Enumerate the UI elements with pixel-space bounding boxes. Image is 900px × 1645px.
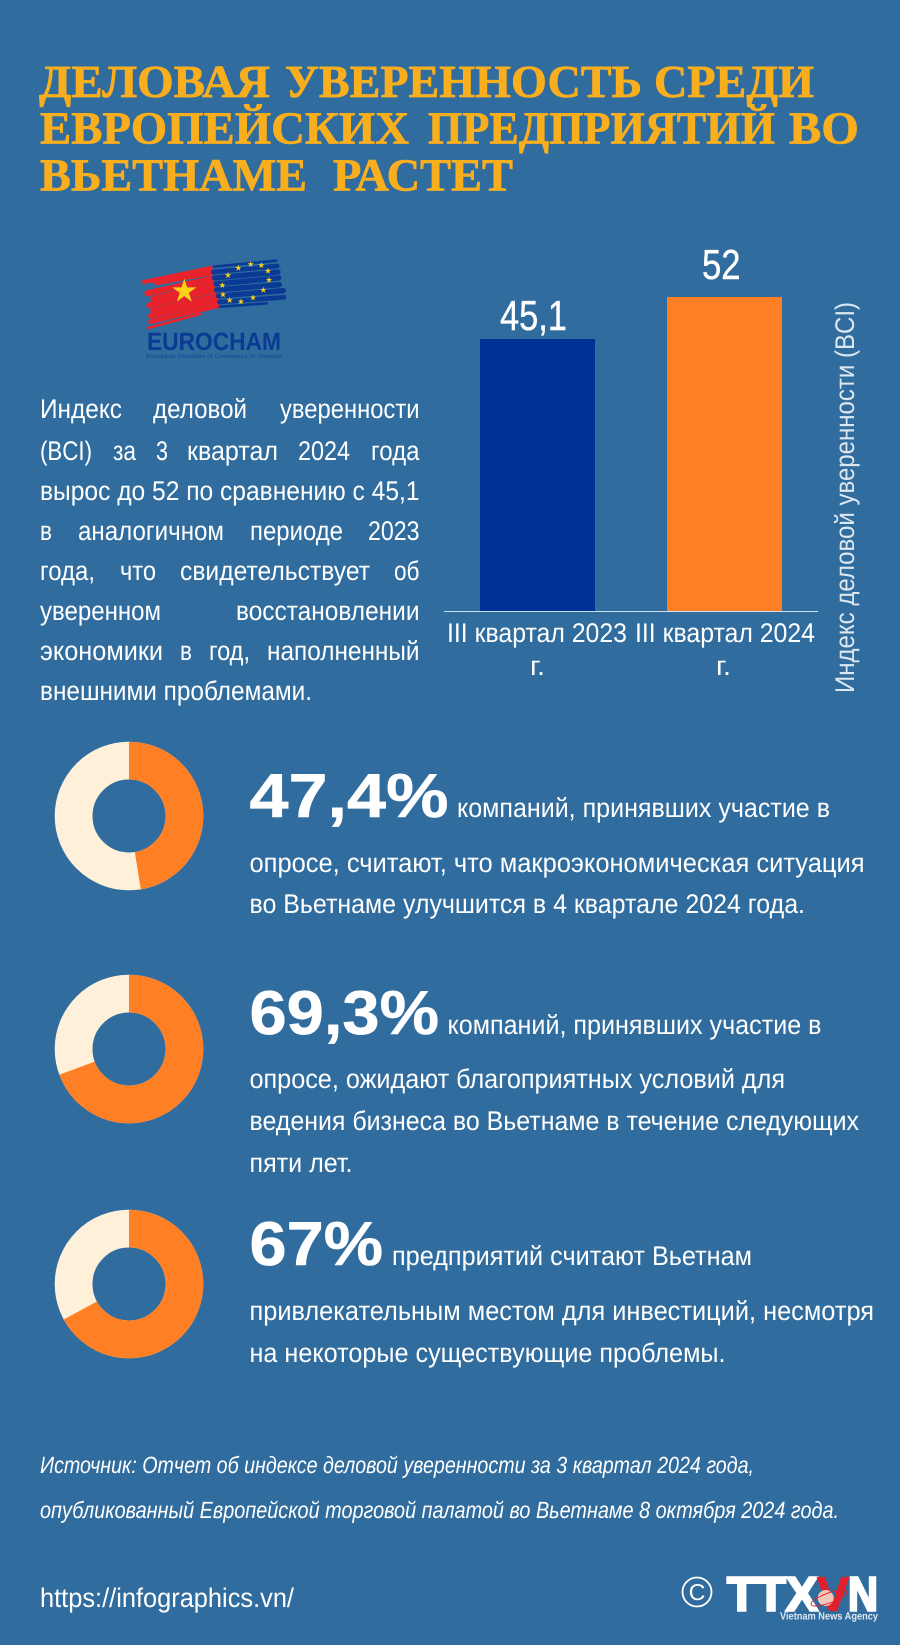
source note <box>40 1452 839 1523</box>
text block: BCI description: в <box>180 636 192 666</box>
stat text: на некоторые существующие проблемы. <box>250 1338 726 1368</box>
title: ВЬЕТНАМЕ <box>40 150 307 200</box>
text block: BCI description: об <box>394 556 420 586</box>
bar: Q3 2024 <box>667 297 782 611</box>
donut chart: 67% <box>74 1229 184 1339</box>
stat text: компаний, принявших участие в <box>457 793 830 823</box>
text block: BCI description: года <box>371 436 420 466</box>
text block: BCI description: в <box>40 516 52 546</box>
stat number: 47,4% <box>250 762 448 831</box>
stat text: ведения бизнеса во Вьетнаме в течение следующих <box>250 1106 859 1136</box>
title <box>39 56 859 200</box>
title: ПРЕДПРИЯТИЙ <box>428 102 775 154</box>
stat number: 69,3% <box>250 979 439 1048</box>
logo wordmark: EUROCHAM <box>147 328 281 356</box>
text block: BCI description: 2023 <box>368 516 420 546</box>
source note: Источник: Отчет об индексе деловой уверенности за 3 квартал 2024 года, <box>40 1452 754 1478</box>
text block: BCI description: периоде <box>250 516 343 546</box>
text block: BCI description: Индекс <box>40 394 122 424</box>
donut chart: 47,4% <box>74 761 184 871</box>
stat number: 67% <box>250 1210 383 1279</box>
text block: BCI description: года, <box>40 556 95 586</box>
tagline: Vietnam News Agency: Vietnam News Agency <box>780 1610 878 1622</box>
text block: BCI description: (BCI) <box>40 436 92 466</box>
text block: BCI description: за <box>113 436 137 466</box>
text block: BCI description: уверенности <box>280 394 420 424</box>
value: 45,1: 45,1 <box>500 292 567 339</box>
stat text: пяти лет. <box>250 1148 352 1178</box>
value: 52: 52 <box>702 241 740 288</box>
title: ДЕЛОВАЯ <box>39 56 270 107</box>
logo: EuroCham <box>144 261 284 360</box>
text block: BCI description: уверенном <box>40 596 161 626</box>
text block: BCI description: внешними проблемами. <box>40 676 312 706</box>
text block: BCI description: вырос до 52 по сравнению с 45,1 <box>40 476 420 506</box>
text block: BCI description: 3 <box>156 436 168 466</box>
stat panel: 47,4% <box>74 761 864 919</box>
stat text: во Вьетнаме улучшится в 4 квартале 2024 года. <box>250 889 805 919</box>
stat text: привлекательным местом для инвестиций, несмотря <box>250 1296 874 1326</box>
title: СРЕДИ <box>654 56 814 107</box>
text block: BCI description: год, <box>209 636 250 666</box>
wordmark: TTXVN: V <box>817 1568 849 1622</box>
wordmark: TTXVN: N <box>848 1568 878 1622</box>
stat text: предприятий считают Вьетнам <box>392 1241 752 1271</box>
text block: BCI description <box>40 394 420 706</box>
icon: copyright: C <box>689 1579 705 1605</box>
wordmark: TTXVN: TTX <box>727 1568 818 1622</box>
text block: BCI description: деловой <box>153 394 247 424</box>
text block: BCI description: восстановлении <box>236 596 420 626</box>
category label: Q3 2023 <box>447 618 627 681</box>
category label: Q3 2024 <box>635 618 815 681</box>
stat text <box>250 793 864 919</box>
title: ВО <box>789 102 859 154</box>
axis title: Индекс деловой уверенности (BCI) <box>830 302 860 693</box>
text block: BCI description: свидетельствует <box>180 556 370 586</box>
stat text: опросе, считают, что макроэкономическая ситуация <box>250 848 864 878</box>
donut chart: 69,3% <box>74 994 184 1104</box>
category label: Q3 2024: г. <box>716 651 731 681</box>
logo: TTXVN copyright mark <box>682 1568 878 1622</box>
bar chart: business confidence index <box>444 241 860 693</box>
category label: Q3 2023: III квартал 2023 <box>447 618 627 648</box>
text block: BCI description: что <box>120 556 156 586</box>
title: РАСТЕТ <box>333 150 513 200</box>
text block: BCI description: аналогичном <box>78 516 224 546</box>
website url: https://infographics.vn/ <box>40 1583 294 1613</box>
text block: BCI description: наполненный <box>267 636 420 666</box>
category label: Q3 2023: г. <box>530 651 545 681</box>
stat text <box>250 1010 859 1178</box>
text block: BCI description: 2024 <box>298 436 350 466</box>
wordmark: TTXVN <box>727 1568 878 1622</box>
stat panel: 69,3% <box>74 979 859 1178</box>
stat text <box>250 1241 874 1368</box>
icon: Vietnam and EU flag brush strokes <box>144 261 284 328</box>
text block: BCI description: экономики <box>40 636 163 666</box>
title: ЕВРОПЕЙСКИХ <box>40 102 409 154</box>
stat text: компаний, принявших участие в <box>448 1010 822 1040</box>
logo tagline: European Chamber of Commerce in Vietnam <box>146 353 282 360</box>
stat panel: 67% <box>74 1210 874 1368</box>
bar: Q3 2023 <box>480 339 595 611</box>
text block: BCI description: квартал <box>187 436 278 466</box>
title: УВЕРЕННОСТЬ <box>285 56 642 107</box>
category label: Q3 2024: III квартал 2024 <box>635 618 815 648</box>
icon: globe with orbit <box>809 1587 849 1609</box>
stat text: опросе, ожидают благоприятных условий для <box>250 1064 785 1094</box>
icon: copyright <box>682 1578 712 1606</box>
